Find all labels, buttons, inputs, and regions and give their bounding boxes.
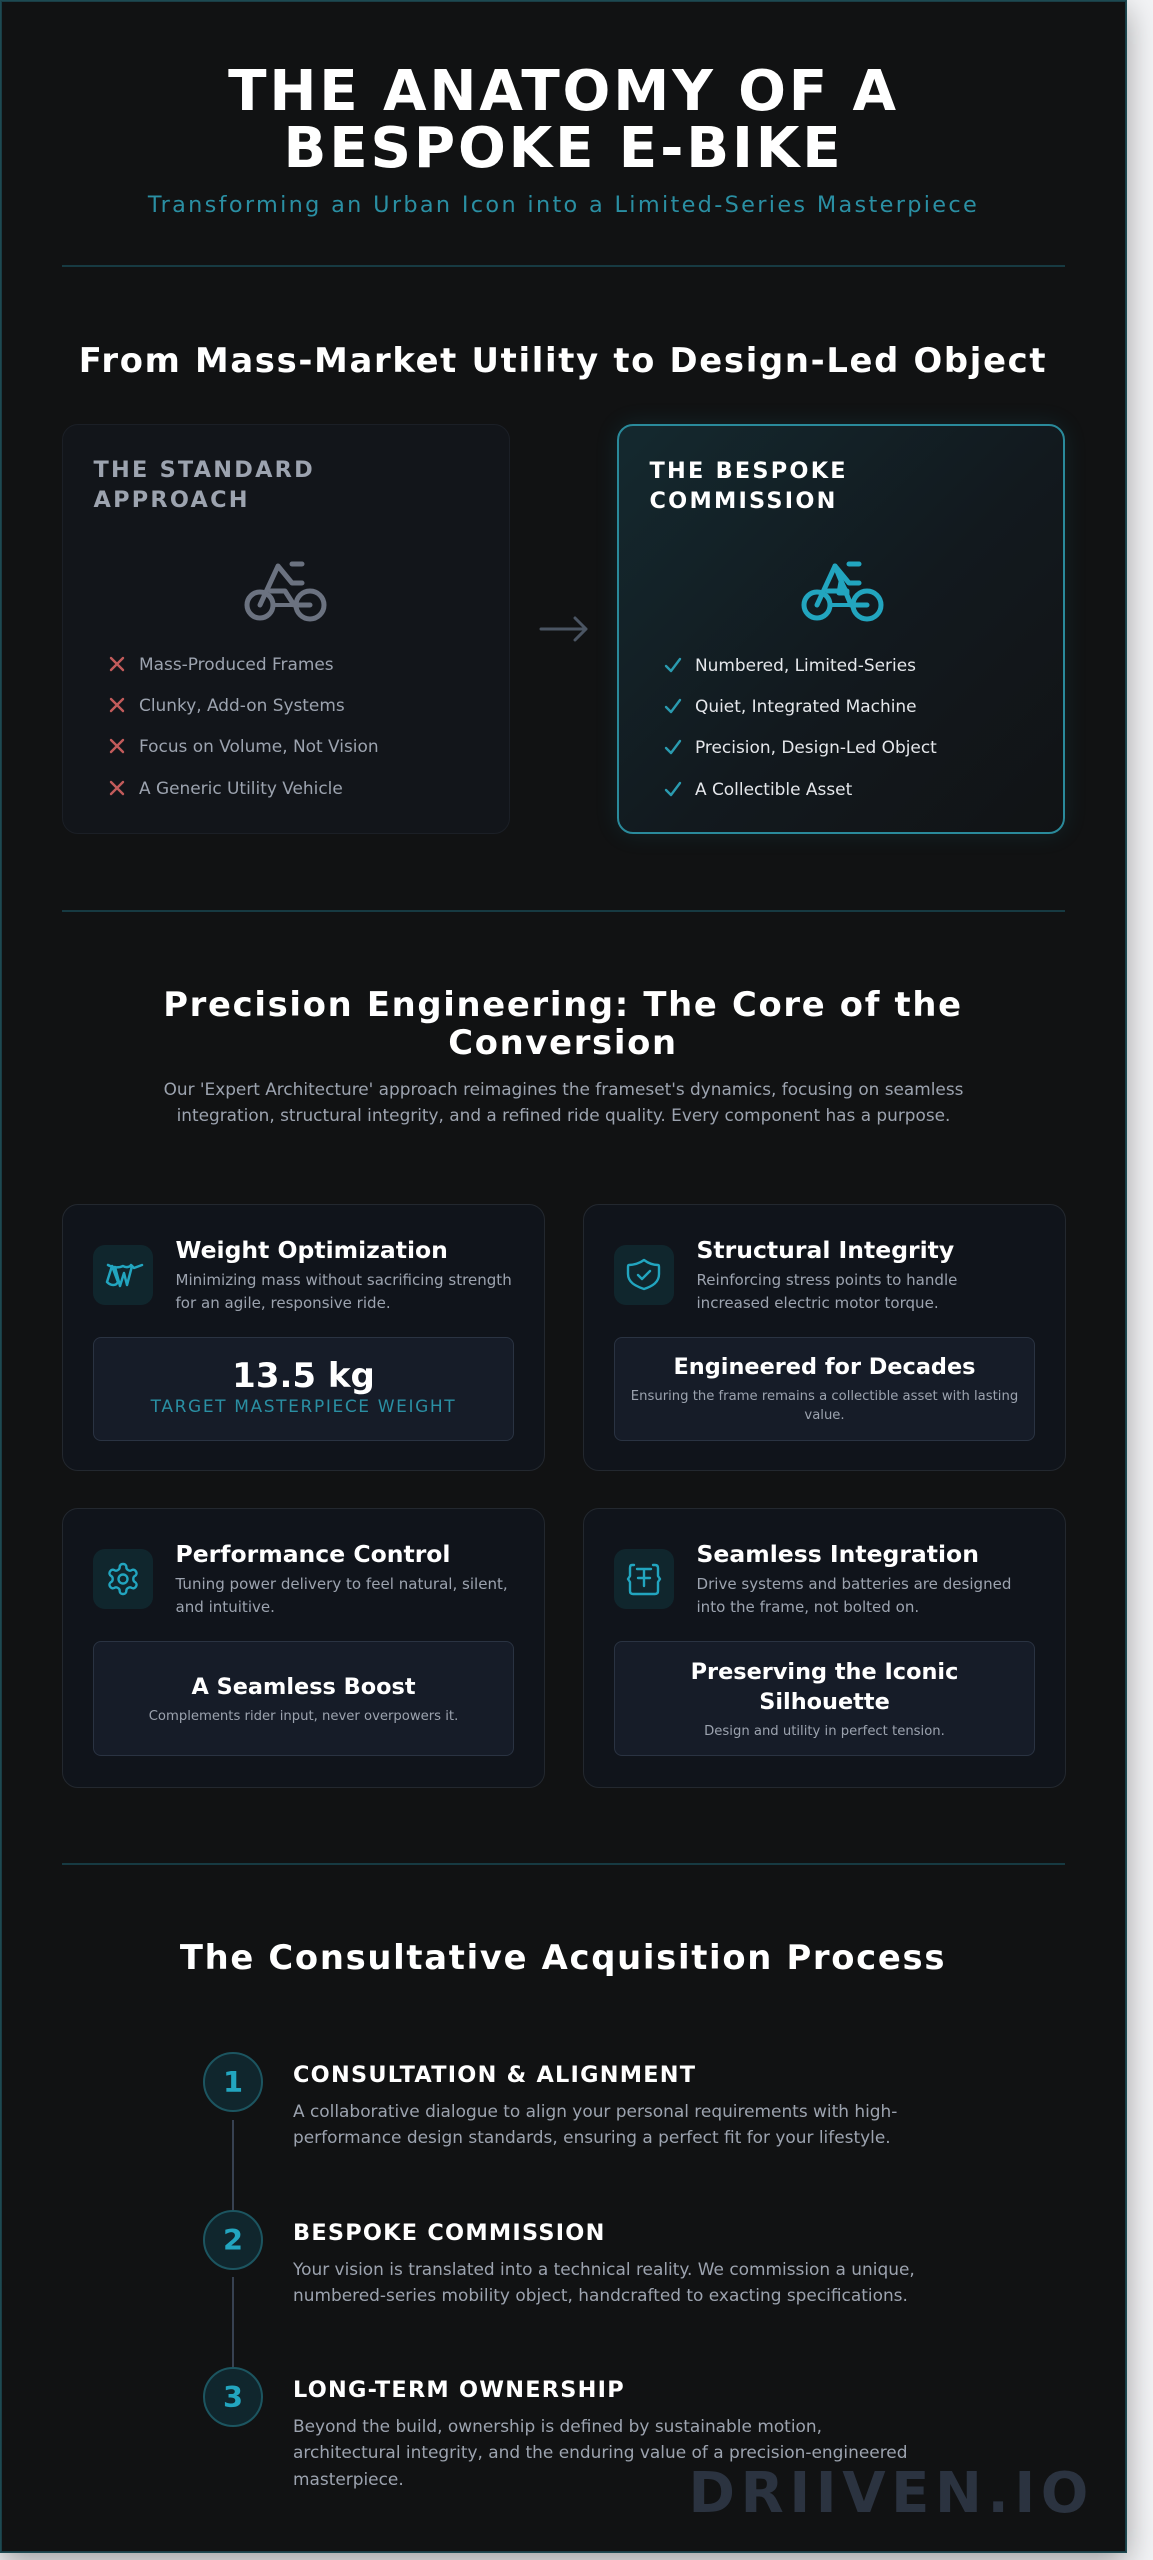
- icon: bespoke bike: [802, 562, 884, 622]
- callout: preserving the silhouette: [614, 1641, 1035, 1756]
- description: Drive systems and batteries are designed: [696, 1575, 1011, 1593]
- panel: seamless integration: [583, 1508, 1066, 1788]
- panel heading: [650, 458, 848, 514]
- icon: standard bike: [244, 562, 326, 622]
- heading: process section: The Consultative Acquisition Process: [180, 1938, 946, 1977]
- description: for an agile, responsive ride.: [176, 1294, 391, 1312]
- panel heading: [94, 457, 315, 512]
- callout title: A Seamless Boost: [191, 1674, 416, 1700]
- icon: weight: [93, 1245, 153, 1305]
- step 3 text: [293, 2416, 907, 2489]
- step 1 text: A collaborative dialogue to align your personal requirements with high-: [293, 2101, 897, 2121]
- heading: engineering section: Conversion: [448, 1023, 678, 1062]
- heading: Weight Optimization: [176, 1236, 448, 1264]
- callout text: Complements rider input, never overpowers it.: [149, 1709, 458, 1724]
- icon: integration: [614, 1549, 674, 1609]
- subtitle: Transforming an Urban Icon into a Limited-Series Masterpiece: [148, 192, 979, 218]
- panel: the bespoke commission: [617, 424, 1065, 834]
- step 2 heading: BESPOKE COMMISSION: [293, 2220, 606, 2246]
- description: [696, 1575, 1011, 1616]
- text: engineering intro: integration, structural integrity, and a refined ride quality. Every component has a purpose.: [177, 1105, 950, 1125]
- step 3 text: architectural integrity, and the enduring value of a precision-engineered: [293, 2442, 907, 2462]
- item: Clunky, Add-on Systems: [139, 695, 345, 715]
- callout title: [691, 1659, 958, 1714]
- callout: target weight: [93, 1337, 514, 1441]
- description: increased electric motor torque.: [696, 1294, 939, 1312]
- heading: Seamless Integration: [696, 1540, 979, 1568]
- heading: Structural Integrity: [696, 1236, 954, 1264]
- panel: performance control: [62, 1508, 545, 1788]
- step 2 text: numbered-series mobility object, handcrafted to exacting specifications.: [293, 2285, 908, 2305]
- text: engineering intro: [164, 1079, 963, 1125]
- description: into the frame, not bolted on.: [696, 1598, 919, 1616]
- step number 1: [203, 2052, 263, 2112]
- connector line: [232, 2277, 234, 2368]
- value label: TARGET MASTERPIECE WEIGHT: [151, 1397, 456, 1417]
- step number 3: [203, 2367, 263, 2427]
- item: Numbered, Limited-Series: [695, 655, 916, 675]
- description: [696, 1271, 957, 1312]
- item: A Collectible Asset: [695, 779, 852, 799]
- list: standard drawbacks: [110, 654, 379, 798]
- step 3 text: masterpiece.: [293, 2469, 404, 2489]
- title: [228, 59, 899, 181]
- description: Tuning power delivery to feel natural, silent,: [176, 1575, 508, 1593]
- description: [176, 1271, 512, 1312]
- watermark: DRIIVEN.IO: [689, 2461, 1094, 2526]
- description: and intuitive.: [176, 1598, 275, 1616]
- callout text: value.: [804, 1408, 845, 1423]
- step 3 text: Beyond the build, ownership is defined by sustainable motion,: [293, 2416, 822, 2436]
- step 1 text: performance design standards, ensuring a perfect fit for your lifestyle.: [293, 2127, 891, 2147]
- step number 2: 2: [223, 2223, 243, 2257]
- panel: structural integrity: [583, 1204, 1066, 1471]
- step number 2: [203, 2210, 263, 2270]
- callout text: [631, 1389, 1018, 1423]
- item: Precision, Design-Led Object: [695, 737, 937, 757]
- arrow: standard to bespoke: [540, 616, 588, 642]
- callout text: Design and utility in perfect tension.: [704, 1724, 945, 1739]
- panel heading: COMMISSION: [650, 488, 838, 514]
- heading: engineering section: Precision Engineering: The Core of the: [163, 985, 963, 1024]
- title: THE ANATOMY OF A: [228, 59, 899, 124]
- item: Mass-Produced Frames: [139, 654, 334, 674]
- callout title: Preserving the Iconic: [691, 1659, 958, 1685]
- step 2 text: [293, 2259, 915, 2305]
- panel heading: THE BESPOKE: [650, 458, 848, 484]
- text: engineering intro: Our 'Expert Architecture' approach reimagines the frameset's dynamics, focusing on seamless: [164, 1079, 963, 1099]
- panel heading: THE STANDARD: [94, 457, 315, 483]
- panel: weight optimization: [62, 1204, 545, 1471]
- step 1 text: [293, 2101, 897, 2147]
- callout: engineered for decades: [614, 1337, 1035, 1441]
- step number 1: 1: [223, 2065, 243, 2099]
- connector line: [232, 2120, 234, 2210]
- value: 13.5 kg: [232, 1356, 375, 1396]
- step number 3: 3: [223, 2380, 243, 2414]
- description: Minimizing mass without sacrificing strength: [176, 1271, 512, 1289]
- item: A Generic Utility Vehicle: [139, 778, 343, 798]
- item: Quiet, Integrated Machine: [695, 696, 917, 716]
- step 2 text: Your vision is translated into a technical reality. We commission a unique,: [293, 2259, 915, 2279]
- heading: Performance Control: [176, 1540, 450, 1568]
- callout: a seamless boost: [93, 1641, 514, 1756]
- list: bespoke benefits: [664, 655, 937, 799]
- icon: gear: [93, 1549, 153, 1609]
- title: BESPOKE E-BIKE: [284, 116, 843, 181]
- step 3 heading: LONG-TERM OWNERSHIP: [293, 2377, 625, 2403]
- panel: the standard approach: [62, 424, 510, 834]
- item: Focus on Volume, Not Vision: [139, 736, 379, 756]
- heading: engineering section: [163, 985, 963, 1062]
- icon: shield: [614, 1245, 674, 1305]
- step 1 heading: CONSULTATION & ALIGNMENT: [293, 2062, 696, 2088]
- callout title: Engineered for Decades: [674, 1354, 975, 1380]
- heading: comparison section: From Mass-Market Utility to Design-Led Object: [79, 341, 1047, 380]
- description: [175, 1575, 508, 1616]
- callout title: Silhouette: [759, 1688, 890, 1714]
- callout text: Ensuring the frame remains a collectible asset with lasting: [631, 1389, 1018, 1404]
- panel heading: APPROACH: [94, 486, 250, 512]
- description: Reinforcing stress points to handle: [696, 1271, 957, 1289]
